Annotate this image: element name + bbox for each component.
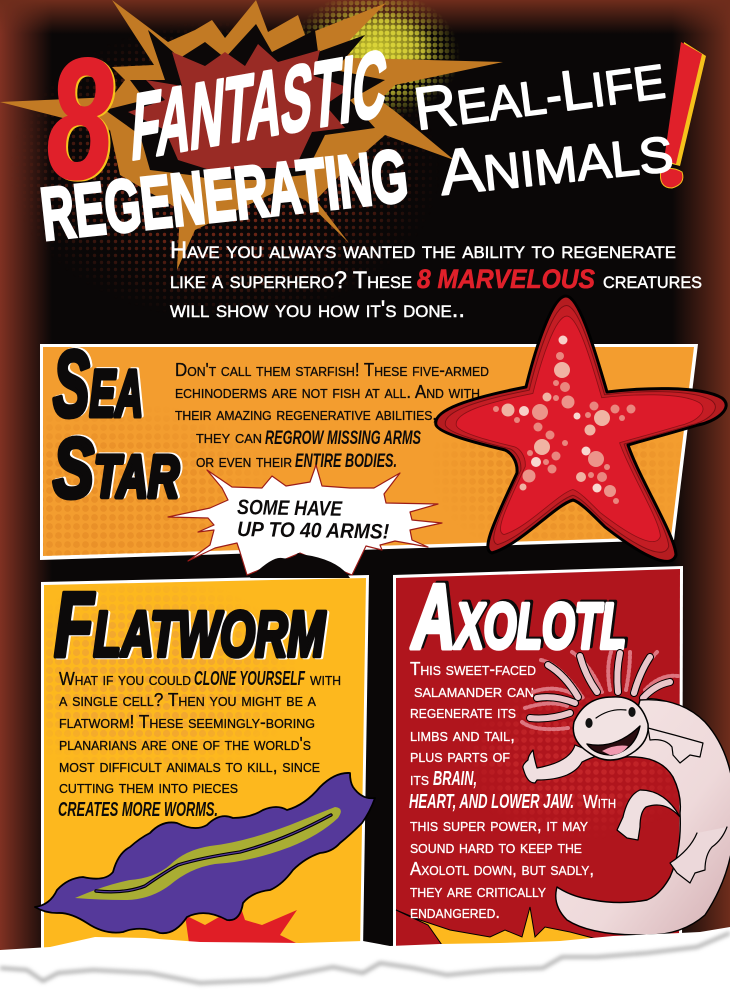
axolotl gill fringe xyxy=(522,652,678,729)
intro paragraph: like a superhero? These xyxy=(170,267,412,294)
torn paper edge at bottom xyxy=(0,927,730,1000)
sea star body text: Don't call them starfish! These five-armed xyxy=(175,360,489,380)
flatworm body text: most difficult animals to kill, since xyxy=(59,756,320,776)
title: REGENERATING: REGENERATING xyxy=(37,134,412,256)
flatworm body text xyxy=(58,668,341,821)
title: number 8: 8 xyxy=(47,23,113,215)
axolotl body text: With xyxy=(583,792,616,812)
heading: Sea Star: Sea xyxy=(53,331,143,436)
burst text: UP TO 40 ARMS! xyxy=(237,518,389,544)
axolotl body text: HEART, AND LOWER JAW. xyxy=(409,791,574,813)
sea star body text: their amazing regenerative abilities, xyxy=(175,404,437,424)
intro paragraph: will show you how it's done.. xyxy=(170,296,465,323)
axolotl eyes xyxy=(585,707,636,728)
axolotl body text: Axolotl down, but sadly, xyxy=(410,859,594,879)
axolotl body text: limbs and tail, xyxy=(410,725,515,745)
axolotl gills xyxy=(530,653,675,718)
intro paragraph xyxy=(170,237,702,323)
sea star body text: or even their xyxy=(196,451,292,471)
flatworm body text: What if you could xyxy=(59,669,191,689)
axolotl body and tail xyxy=(556,700,730,935)
intro paragraph: Have you always wanted the ability to regenerate xyxy=(170,237,676,264)
icon: red sea star xyxy=(436,296,726,561)
icon: flatworm xyxy=(35,773,375,933)
heading: Sea Star: Star xyxy=(53,421,179,515)
burst text: SOME HAVE xyxy=(237,496,343,521)
panel: axolotl xyxy=(393,566,730,950)
axolotl body text: regenerate its xyxy=(410,702,516,722)
icon: axolotl xyxy=(522,652,730,935)
axolotl body text: plus parts of xyxy=(410,746,510,766)
heading: Flatworm: Flatworm xyxy=(54,574,326,676)
axolotl mouth xyxy=(587,726,640,755)
axolotl body text: sound hard to keep the xyxy=(410,837,582,857)
panel: sea star xyxy=(40,331,698,560)
sea star body text: they can xyxy=(196,427,262,447)
panel: flatworm xyxy=(35,574,375,950)
flatworm body text: cutting them into pieces xyxy=(59,777,238,797)
axolotl body text: its xyxy=(410,769,429,789)
flatworm body text: CLONE YOURSELF xyxy=(194,668,305,690)
sea star panel background xyxy=(40,344,698,560)
title: Animals: ANIMALS xyxy=(436,113,676,209)
red burst at bottom of flatworm panel xyxy=(185,905,300,950)
burst text xyxy=(237,496,389,544)
axolotl body text: they are critically xyxy=(410,881,546,901)
axolotl body text xyxy=(409,659,616,922)
heading: Axolotl: Axolotl xyxy=(411,566,626,668)
speech burst: some have up to 40 arms xyxy=(168,465,442,578)
axolotl body text: BRAIN, xyxy=(433,768,477,790)
heading: Sea Star xyxy=(53,331,179,515)
axolotl back leg, left xyxy=(617,790,680,840)
comic explosion burst behind title xyxy=(0,0,503,320)
flatworm body text: a single cell? Then you might be a xyxy=(59,690,316,710)
flatworm body text: with xyxy=(310,669,341,689)
title: exclamation mark xyxy=(660,42,706,188)
title: Real-Life: REAL-LIFE xyxy=(410,44,669,143)
sea star body text: echinoderms are not fish at all. And with xyxy=(175,382,480,402)
intro paragraph: 8 MARVELOUS xyxy=(417,264,595,294)
intro paragraph: creatures xyxy=(603,267,702,294)
sea star body text xyxy=(175,360,489,472)
sea star body text: ENTIRE BODIES. xyxy=(295,451,397,472)
flatworm body text: flatworm! These seemingly-boring xyxy=(59,712,315,732)
axolotl nose line xyxy=(596,710,626,718)
axolotl left arm with thumbs-up xyxy=(523,745,600,783)
sea star body text: REGROW MISSING ARMS xyxy=(265,428,421,449)
yellow burst at bottom of axolotl panel xyxy=(396,907,620,945)
flatworm panel background xyxy=(41,575,369,950)
axolotl tongue xyxy=(602,746,628,755)
flatworm body text: CREATES MORE WORMS. xyxy=(58,799,218,821)
axolotl panel background xyxy=(393,566,683,950)
axolotl body text: This sweet-faced xyxy=(410,659,536,679)
axolotl body text: salamander can xyxy=(414,681,534,701)
axolotl right arm xyxy=(648,728,703,763)
axolotl back leg, right xyxy=(670,827,727,883)
axolotl body text: endangered. xyxy=(410,902,500,922)
sea star spots xyxy=(493,336,636,504)
axolotl body text: this super power, it may xyxy=(410,815,588,835)
axolotl head xyxy=(573,697,648,760)
flatworm body text: planarians are one of the world's xyxy=(59,734,311,754)
